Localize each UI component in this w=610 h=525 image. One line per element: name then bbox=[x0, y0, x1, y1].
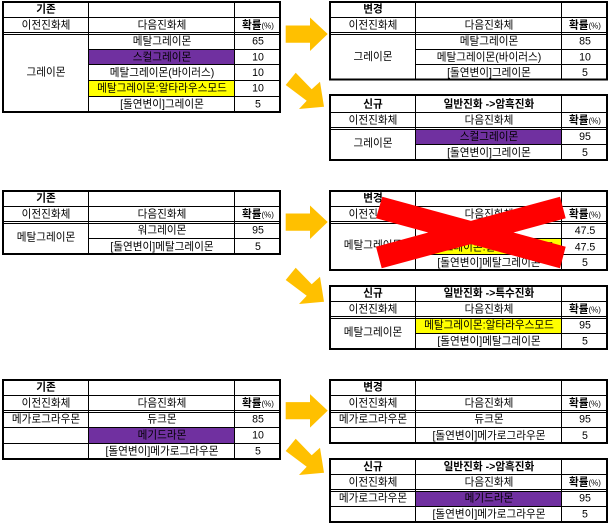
header row: 이전진화체 bbox=[349, 208, 397, 220]
header row: 이전진화체 bbox=[349, 304, 397, 316]
table: changed metal gray-mon evolution (crossed out) bbox=[330, 191, 607, 270]
data rows: 47.5 bbox=[575, 241, 595, 253]
header row bbox=[349, 192, 601, 220]
data rows: 10 bbox=[252, 83, 264, 95]
header row: 다음진화체 bbox=[465, 304, 513, 316]
data rows bbox=[344, 224, 595, 269]
data rows: 10 bbox=[252, 67, 264, 79]
header row: 이전진화체 bbox=[22, 397, 70, 409]
data rows: 메탈그레이몬(바이러스) bbox=[437, 51, 541, 64]
data rows: 메가로그라우몬 bbox=[12, 414, 80, 426]
header row: 다음진화체 bbox=[138, 397, 186, 409]
data rows: 10 bbox=[579, 52, 591, 64]
data rows: 5 bbox=[255, 241, 261, 253]
data rows: 스컬그레이몬 bbox=[460, 130, 518, 143]
data rows bbox=[354, 35, 591, 79]
header row bbox=[349, 98, 601, 126]
header row: 이전진화체 bbox=[22, 208, 70, 220]
data rows: 5 bbox=[582, 430, 588, 442]
table: new mega gargo-mon evolution bbox=[330, 459, 607, 522]
data rows: 메탈그레이몬:알타라우스모드 bbox=[97, 82, 227, 95]
header row: 일반진화 ->암흑진화 bbox=[444, 98, 535, 111]
table: existing mega gargo-mon evolution bbox=[3, 380, 280, 459]
header row: 확률(%) bbox=[569, 396, 601, 409]
data rows: 메가로그라우몬 bbox=[339, 414, 407, 426]
data rows: 메탈그레이몬 bbox=[460, 224, 518, 237]
data rows: [돌연변이]메탈그레이몬 bbox=[110, 240, 214, 253]
data rows: 5 bbox=[255, 446, 261, 458]
data rows: 메탈그레이몬 bbox=[344, 326, 402, 339]
data rows: [돌연변이]메탈그레이몬 bbox=[437, 256, 541, 269]
data rows: 85 bbox=[252, 414, 264, 426]
table: existing gray-mon evolution bbox=[3, 2, 280, 112]
data rows: [돌연변이]메가로그라우몬 bbox=[432, 430, 546, 442]
arrow: straight 3 bbox=[286, 394, 328, 428]
data rows bbox=[17, 224, 264, 253]
header row: 확률(%) bbox=[569, 113, 601, 126]
header row bbox=[349, 381, 601, 409]
header row: 신규 bbox=[363, 460, 383, 473]
data rows: 95 bbox=[252, 225, 264, 237]
data rows: 메기드라몬 bbox=[465, 492, 514, 504]
data rows: 95 bbox=[579, 319, 591, 331]
red X cross-out bbox=[376, 197, 566, 268]
header row: 다음진화체 bbox=[465, 397, 513, 409]
arrow: diagonal 3 bbox=[286, 439, 324, 475]
header row: 기존 bbox=[36, 191, 56, 204]
header row: 다음진화체 bbox=[465, 20, 513, 32]
data rows: 메탈그레이몬(바이러스) bbox=[110, 66, 214, 79]
header row bbox=[22, 3, 274, 32]
header row: 신규 bbox=[363, 98, 383, 111]
header row: 기존 bbox=[36, 380, 56, 393]
header row: 다음진화체 bbox=[465, 208, 513, 220]
header row bbox=[22, 191, 274, 220]
arrow: straight 2 bbox=[286, 206, 328, 239]
header row: 확률(%) bbox=[242, 19, 274, 32]
data rows: 47.5 bbox=[575, 225, 595, 237]
arrow: diagonal 2 bbox=[286, 268, 324, 304]
header row: 확률(%) bbox=[569, 476, 601, 489]
header row: 이전진화체 bbox=[349, 20, 397, 32]
data rows: [돌연변이]그레이몬 bbox=[120, 99, 204, 111]
data rows: 워그레이몬 bbox=[138, 224, 187, 237]
data rows: 5 bbox=[255, 99, 261, 111]
data rows: 메탈그레이몬 bbox=[460, 35, 518, 48]
table: changed mega gargo-mon evolution bbox=[330, 380, 607, 443]
header row: 다음진화체 bbox=[138, 208, 186, 220]
data rows bbox=[339, 414, 591, 442]
data rows: 85 bbox=[579, 36, 591, 48]
data rows: 5 bbox=[582, 147, 588, 159]
data rows: 10 bbox=[252, 52, 264, 64]
arrow: diagonal 1 bbox=[286, 73, 324, 109]
data rows: 메탈그레이몬 bbox=[17, 231, 75, 244]
header row: 변경 bbox=[363, 381, 383, 393]
header row: 이전진화체 bbox=[349, 114, 397, 126]
header row: 확률(%) bbox=[569, 303, 601, 316]
data rows: 5 bbox=[582, 67, 588, 79]
data rows: 메탈그레이몬:알타라우스모드 bbox=[424, 318, 554, 331]
data rows: 95 bbox=[579, 414, 591, 426]
header row: 일반진화 ->암흑진화 bbox=[444, 460, 535, 473]
header row bbox=[349, 4, 601, 32]
table: new gray-mon evolution bbox=[330, 95, 607, 160]
data rows: [돌연변이]메가로그라우몬 bbox=[105, 446, 219, 458]
header row bbox=[349, 460, 601, 489]
data rows: 듀크몬 bbox=[147, 414, 177, 426]
data rows: 메탈그레이몬 bbox=[133, 35, 191, 48]
data rows: [돌연변이]그레이몬 bbox=[447, 147, 531, 159]
data rows: [돌연변이]그레이몬 bbox=[447, 67, 531, 79]
header row: 변경 bbox=[363, 4, 383, 16]
arrow: straight 1 bbox=[286, 18, 328, 51]
header row: 다음진화체 bbox=[138, 20, 186, 32]
data rows: 그레이몬 bbox=[26, 67, 66, 79]
data rows: 메탈그레이몬:알타라우스모드 bbox=[424, 240, 554, 253]
header row bbox=[349, 287, 601, 316]
header row: 기존 bbox=[36, 3, 56, 16]
data rows bbox=[344, 318, 591, 348]
header row: 확률(%) bbox=[242, 396, 274, 409]
header row: 다음진화체 bbox=[465, 477, 513, 489]
header row: 일반진화 ->특수진화 bbox=[444, 287, 535, 300]
header row: 확률(%) bbox=[242, 207, 274, 220]
data rows bbox=[339, 492, 591, 521]
table: changed gray-mon evolution bbox=[330, 2, 607, 80]
data rows: 10 bbox=[252, 430, 264, 442]
data rows: 듀크몬 bbox=[474, 414, 504, 426]
data rows: [돌연변이]메가로그라우몬 bbox=[432, 509, 546, 521]
header row bbox=[22, 380, 274, 409]
data rows: 메가로그라우몬 bbox=[339, 492, 407, 504]
header row: 이전진화체 bbox=[349, 397, 397, 409]
header row: 신규 bbox=[363, 287, 383, 300]
header row: 변경 bbox=[363, 192, 383, 204]
data rows: 메탈그레이몬 bbox=[344, 239, 402, 252]
header row: 이전진화체 bbox=[349, 477, 397, 489]
header row: 확률(%) bbox=[569, 207, 601, 220]
data rows: 5 bbox=[582, 336, 588, 348]
header row: 다음진화체 bbox=[465, 114, 513, 126]
data rows: 스컬그레이몬 bbox=[133, 51, 191, 64]
data rows: 그레이몬 bbox=[354, 138, 393, 150]
data rows: 95 bbox=[579, 492, 591, 504]
data rows: [돌연변이]메탈그레이몬 bbox=[437, 335, 541, 348]
data rows: 95 bbox=[579, 131, 591, 143]
data rows: 65 bbox=[252, 36, 264, 48]
header row: 이전진화체 bbox=[22, 20, 70, 32]
table: existing metal gray-mon evolution bbox=[3, 191, 280, 254]
data rows: 그레이몬 bbox=[354, 51, 393, 63]
table: new metal gray-mon evolution bbox=[330, 286, 607, 349]
data rows: 5 bbox=[582, 509, 588, 521]
data rows: 메기드라몬 bbox=[138, 430, 187, 442]
data rows bbox=[12, 414, 264, 458]
data rows bbox=[354, 130, 591, 159]
header row: 확률(%) bbox=[569, 19, 601, 32]
data rows: 5 bbox=[582, 257, 588, 269]
data rows bbox=[26, 35, 264, 111]
